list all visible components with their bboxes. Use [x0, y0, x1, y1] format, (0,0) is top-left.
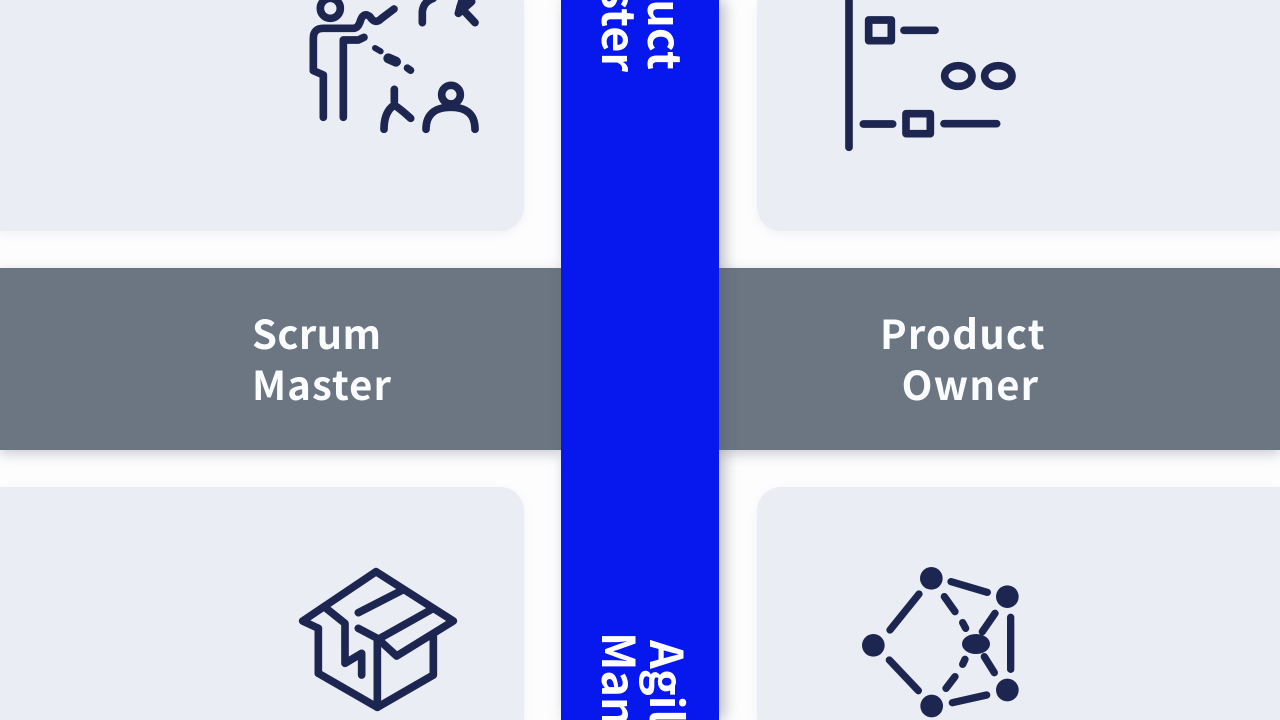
panel: bottom-right card	[757, 487, 1280, 720]
label: Agile Manager	[589, 632, 702, 720]
icon: presenter and audience	[310, 0, 479, 134]
panel: top-right card	[757, 0, 1280, 231]
label: Product Owner	[880, 303, 1046, 412]
label: Scrum Master: Master	[252, 354, 392, 412]
band: Scrum Master	[0, 268, 561, 450]
panel: bottom-left card	[0, 487, 524, 720]
icon: network graph	[862, 567, 1019, 718]
icon: open box	[298, 568, 458, 712]
panel: top-left card	[0, 0, 524, 231]
label: Scrum Master	[252, 303, 392, 412]
band: Product Owner	[719, 268, 1280, 450]
label: Product Owner: Owner	[902, 354, 1039, 412]
label: Scrum Master: Scrum	[252, 303, 382, 361]
spine shadow	[561, 0, 719, 720]
label: Product Owner: Product	[880, 303, 1046, 361]
vertical spine	[561, 0, 719, 720]
label: Product Master	[589, 0, 700, 72]
icon: backlog diagram	[845, 0, 1016, 152]
